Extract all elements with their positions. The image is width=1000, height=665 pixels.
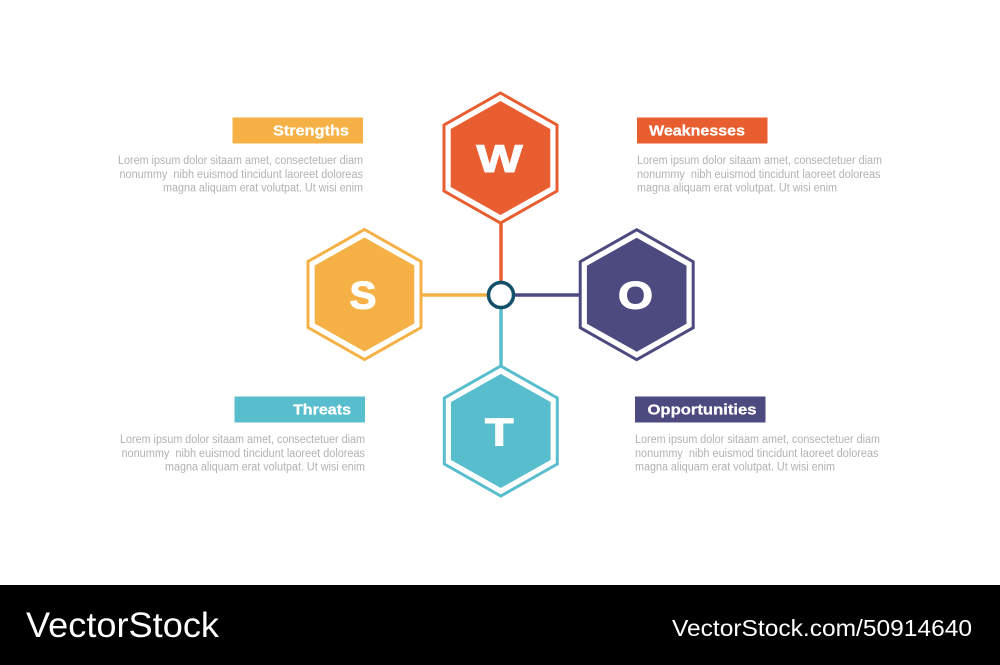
hexagon: S: S: [350, 274, 376, 318]
hexagon: W: [444, 93, 557, 223]
text block: Weaknesses: Lorem ipsum dolor sitaam amet, consectetuer diam: [637, 155, 882, 167]
panel: Weaknesses: [637, 118, 882, 194]
connector: W: [499, 222, 503, 285]
text block: Strengths: [118, 155, 363, 194]
watermark bar: [0, 585, 1000, 665]
hexagon: T: T: [485, 412, 514, 454]
text block: Opportunities: magna aliquam erat volutpat. Ut wisi enim: [635, 462, 835, 474]
connector: T: [499, 306, 503, 367]
hexagon: S: [308, 230, 421, 360]
text block: Threats: Lorem ipsum dolor sitaam amet, consectetuer diam: [120, 434, 365, 446]
label: Opportunities: [635, 396, 766, 422]
text block: Opportunities: Lorem ipsum dolor sitaam amet, consectetuer diam: [635, 434, 880, 446]
panel: Opportunities: [635, 396, 880, 474]
text block: Threats: nonummy nibh euismod tincidunt laoreet doloreas: [122, 448, 365, 460]
text block: Strengths: Lorem ipsum dolor sitaam amet, consectetuer diam: [118, 155, 363, 167]
label: Weaknesses: Weaknesses: [649, 122, 745, 140]
hexagon: W: W: [476, 138, 523, 181]
text block: Weaknesses: nonummy nibh euismod tincidunt laoreet doloreas: [637, 169, 881, 181]
text block: Strengths: magna aliquam erat volutpat. Ut wisi enim: [163, 182, 363, 194]
label: Strengths: Strengths: [273, 122, 349, 140]
connector: O: [512, 293, 580, 297]
hexagon: T: [444, 366, 557, 496]
text block: Opportunities: [635, 434, 880, 474]
hexagon: O: [580, 230, 693, 360]
text block: Threats: [120, 434, 365, 474]
text block: Weaknesses: [637, 155, 882, 194]
label: Strengths: [232, 118, 363, 144]
label: Opportunities: Opportunities: [648, 402, 756, 418]
label: Threats: [234, 396, 365, 422]
text block: Opportunities: nonummy nibh euismod tincidunt laoreet doloreas: [635, 448, 879, 460]
center node: [488, 282, 514, 308]
text block: Strengths: nonummy nibh euismod tincidunt laoreet doloreas: [120, 169, 363, 181]
label: Weaknesses: [637, 118, 768, 144]
connector: S: [421, 293, 490, 297]
panel: Threats: [120, 396, 365, 474]
watermark logo: VectorStock: [26, 606, 220, 645]
hexagon: O: O: [618, 274, 653, 318]
panel: Strengths: [118, 118, 363, 194]
text block: Weaknesses: magna aliquam erat volutpat. Ut wisi enim: [637, 182, 837, 194]
watermark url: VectorStock.com/50914640: [672, 615, 972, 641]
label: Threats: Threats: [293, 402, 351, 418]
text block: Threats: magna aliquam erat volutpat. Ut wisi enim: [165, 462, 365, 474]
